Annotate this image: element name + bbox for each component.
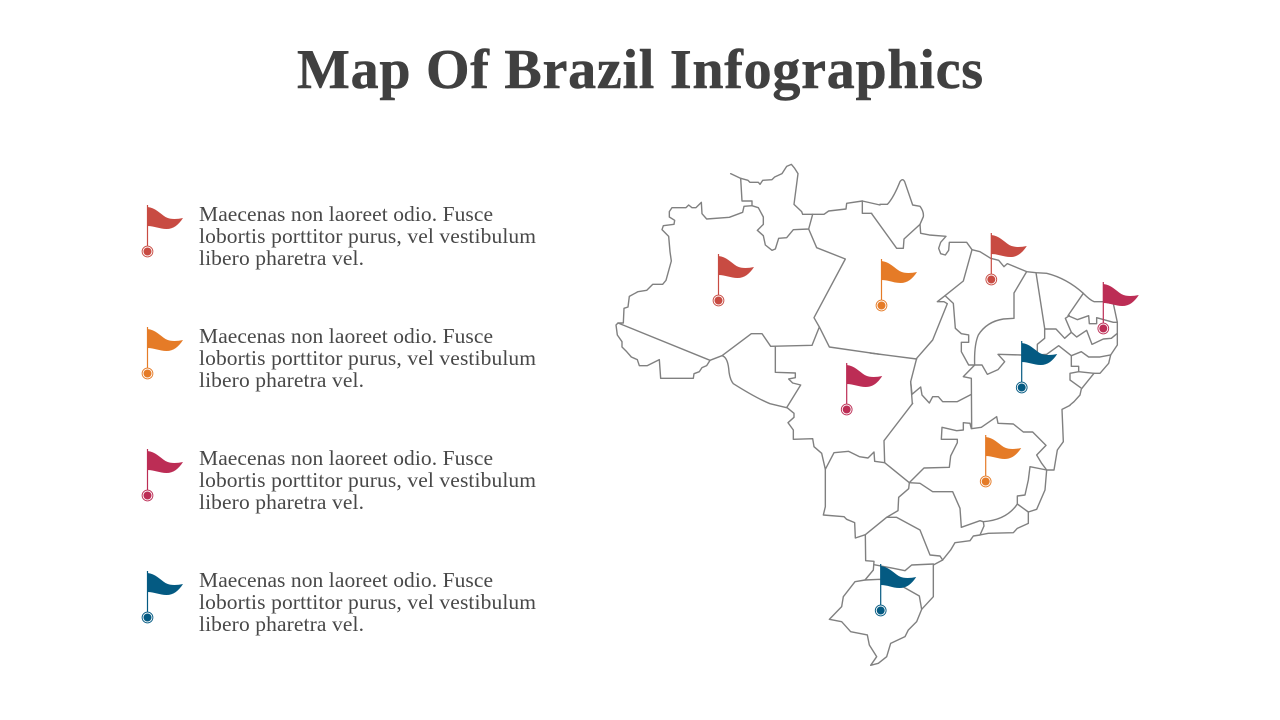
text block 2: Maecenas non laoreet odio. Fusce — [199, 324, 493, 348]
map of Brazil — [616, 164, 1117, 665]
text block 3: lobortis porttitor purus, vel vestibulum — [199, 468, 536, 492]
text block 2: lobortis porttitor purus, vel vestibulum — [199, 346, 536, 370]
legend item 3 — [142, 446, 536, 514]
text block 3: libero pharetra vel. — [199, 490, 364, 514]
text block 1: Maecenas non laoreet odio. Fusce — [199, 202, 493, 226]
map pin: blue, south — [875, 564, 916, 616]
icon: crimson legend flag — [142, 449, 183, 501]
map pin: orange, south-east — [980, 435, 1021, 487]
map pin: crimson, centre-west — [841, 363, 882, 415]
icon: blue legend flag — [142, 571, 183, 623]
map pin: red, north-west — [713, 254, 754, 306]
icon: orange legend flag — [142, 327, 183, 379]
title: Map Of Brazil Infographics — [297, 39, 983, 101]
text block 3: Maecenas non laoreet odio. Fusce — [199, 446, 493, 470]
legend item 1 — [142, 202, 536, 270]
map pin: orange, north — [876, 259, 917, 311]
icon: red legend flag — [142, 205, 183, 257]
text block 1: lobortis porttitor purus, vel vestibulum — [199, 224, 536, 248]
text block 1: libero pharetra vel. — [199, 246, 364, 270]
text block 4: Maecenas non laoreet odio. Fusce — [199, 568, 493, 592]
text block 2: libero pharetra vel. — [199, 368, 364, 392]
map pin: blue, north-east interior — [1016, 341, 1057, 393]
map pin: red, north-east — [986, 233, 1027, 285]
legend item 2 — [142, 324, 536, 392]
map pin: crimson, far east — [1098, 282, 1139, 334]
text block 4: lobortis porttitor purus, vel vestibulum — [199, 590, 536, 614]
text block 4: libero pharetra vel. — [199, 612, 364, 636]
legend item 4 — [142, 568, 536, 636]
